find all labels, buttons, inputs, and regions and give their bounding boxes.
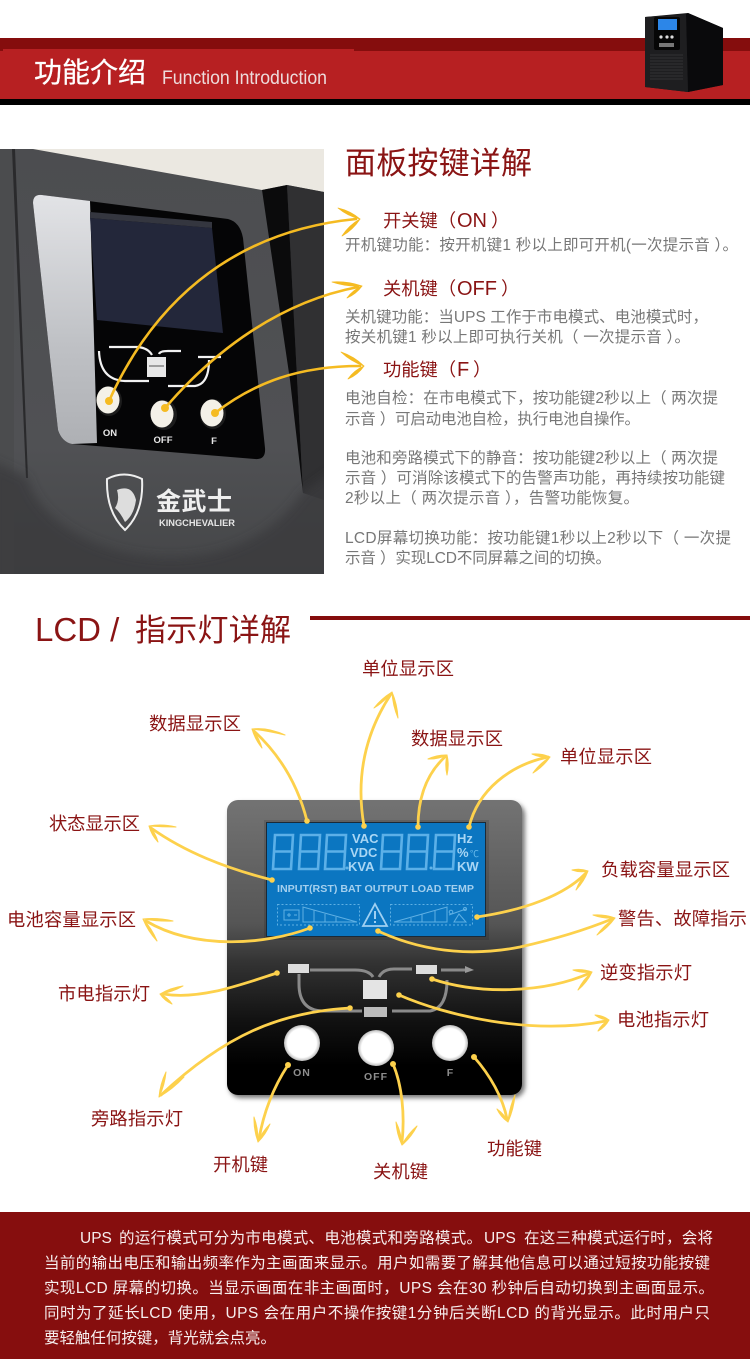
- text block: F key: [345, 359, 731, 567]
- footer note: 在这三种模式运行时，会将: [524, 1229, 713, 1247]
- unit labels: %: [457, 845, 469, 860]
- text block: F key: 电池自检：在市电模式下，按功能键2秒以上（ 两次提: [345, 389, 718, 407]
- callout: load capacity: [474, 859, 730, 920]
- panel buttons: [284, 1025, 468, 1083]
- brand logo: 金武士: [156, 488, 232, 516]
- callout: data area left: 数据显示区: [149, 713, 241, 734]
- callout: unit area top: 单位显示区: [362, 658, 454, 679]
- footer note: 实现LCD 屏幕的切换。当显示画面在非主画面时，UPS 会在30 秒钟后自动切换到主画面显示。: [44, 1279, 714, 1297]
- panel buttons: OFF: [364, 1071, 388, 1083]
- text block: F key: F: [457, 359, 469, 381]
- callout: battery capacity: 电池容量显示区: [7, 909, 136, 930]
- unit labels: ℃: [470, 849, 479, 859]
- seven-segment digits: [273, 835, 455, 869]
- callout: unit area right: [466, 746, 652, 830]
- footer note: 的运行模式可分为市电模式、电池模式和旁路模式。: [119, 1229, 482, 1247]
- callout: power-on key: [213, 1062, 291, 1175]
- callout: power-off key: 关机键: [373, 1161, 428, 1182]
- footer note: [0, 1212, 750, 1359]
- callout: battery capacity: [7, 909, 313, 942]
- LCD screen: [266, 822, 486, 936]
- footer note: 当前的输出电压和输出频率作为主画面来显示。用户如需要了解其他信息可以通过短按功能按键: [44, 1254, 710, 1272]
- icon: UPS tower: [645, 13, 723, 92]
- header title: 功能介绍: [34, 57, 146, 88]
- text block: OFF key: ）: [501, 278, 519, 299]
- unit labels: VDC: [350, 845, 378, 860]
- text block: OFF key: OFF: [457, 278, 497, 300]
- text block: ON key: 开关键（: [383, 210, 456, 231]
- text block: ON key: [345, 210, 738, 254]
- callout: battery lamp: 电池指示灯: [617, 1009, 709, 1030]
- indicator lamps: [288, 964, 474, 1017]
- text block: ON key: ON: [457, 210, 487, 232]
- footer note: UPS: [80, 1230, 112, 1247]
- header banner: [0, 38, 750, 105]
- unit labels: Hz: [457, 831, 473, 846]
- section heading: LCD: [35, 611, 291, 648]
- callout: mains lamp: 市电指示灯: [58, 983, 150, 1004]
- text block: F key: LCD屏幕切换功能：按功能键1秒以上2秒以下（ 一次提: [345, 529, 731, 547]
- callout: inverter lamp: [429, 962, 692, 990]
- unit labels: VAC: [352, 831, 379, 846]
- header subtitle: Function Introduction: [162, 68, 327, 89]
- arrow: F key: [211, 352, 364, 417]
- callout: power-off key: [373, 1061, 428, 1182]
- callout: inverter lamp: 逆变指示灯: [600, 962, 692, 983]
- text block: F key: 示音 ）可启动电池自检，执行电池自操作。: [345, 410, 640, 428]
- unit labels: KW: [457, 859, 479, 874]
- callout: warning and fault: [375, 908, 747, 952]
- arrow: OFF key: [161, 282, 362, 412]
- text block: F key: 2秒以上（ 两次提示音 ），告警功能恢复。: [345, 489, 639, 507]
- panel: product photo: [0, 149, 334, 590]
- callout: mains lamp: [58, 970, 280, 1004]
- section heading: LCD: LCD /: [35, 611, 120, 648]
- callout: unit area top: [361, 658, 454, 829]
- section heading: panel keys: 面板按键详解: [345, 146, 532, 181]
- brand logo: KINGCHEVALIER: [159, 518, 235, 529]
- callout: warning and fault: 警告、故障指示: [618, 908, 747, 929]
- unit labels: [348, 831, 479, 874]
- callout: battery lamp: [396, 992, 709, 1031]
- text block: F key: 示音 ）实现LCD不同屏幕之间的切换。: [345, 549, 611, 567]
- load gauge: [390, 904, 472, 925]
- callout: status area: 状态显示区: [49, 813, 140, 834]
- text block: OFF key: [345, 278, 708, 346]
- callout: data area right: 数据显示区: [411, 728, 503, 749]
- footer note: 同时为了延长LCD 使用，UPS 会在用户不操作按键1分钟后关断LCD 的背光显示。此时用户只: [44, 1304, 710, 1322]
- callout: bypass lamp: [91, 1005, 353, 1129]
- text block: OFF key: 关机键（: [383, 278, 456, 299]
- buttons: [96, 386, 226, 447]
- callout: function key: 功能键: [487, 1138, 542, 1159]
- buttons: ON: [103, 428, 117, 439]
- callout: status area: [49, 813, 275, 883]
- battery gauge: [278, 904, 360, 925]
- status labels: INPUT(RST) BAT OUTPUT LOAD TEMP: [277, 883, 474, 895]
- text block: OFF key: 按关机键1 秒以上即可执行关机（ 一次提示音 ）。: [345, 328, 690, 346]
- text block: F key: ）: [473, 359, 491, 380]
- callout: bypass lamp: 旁路指示灯: [91, 1108, 183, 1129]
- text block: F key: 电池和旁路模式下的静音：按功能键2秒以上（ 两次提: [345, 449, 718, 467]
- screen bezel: [33, 195, 265, 459]
- text block: F key: 功能键（: [383, 359, 456, 380]
- footer note: UPS: [484, 1230, 516, 1247]
- text block: F key: 示音 ）可消除该模式下的告警声功能，再持续按功能键: [345, 469, 725, 487]
- panel buttons: ON: [293, 1067, 311, 1079]
- footer note: 要轻触任何按键，背光就会点亮。: [44, 1329, 276, 1347]
- callout: data area left: [149, 713, 310, 824]
- unit labels: KVA: [348, 859, 375, 874]
- callout: power-on key: 开机键: [213, 1154, 268, 1175]
- text block: ON key: 开机键功能：按开机键1 秒以上即可开机(一次提示音 ）。: [345, 236, 738, 254]
- warning triangle: [363, 904, 387, 926]
- panel buttons: F: [447, 1067, 454, 1079]
- callout: function key: [471, 1054, 542, 1159]
- arrow: ON key: [105, 208, 360, 405]
- buttons: OFF: [154, 435, 173, 446]
- text block: OFF key: 关机键功能：当UPS 工作于市电模式、电池模式时，: [345, 308, 708, 326]
- buttons: F: [211, 436, 217, 447]
- section heading: LCD: 指示灯详解: [135, 613, 291, 648]
- text block: ON key: ）: [491, 210, 509, 231]
- callout: unit area right: 单位显示区: [560, 746, 652, 767]
- callout: load capacity: 负载容量显示区: [601, 859, 730, 880]
- panel: LCD front panel: [227, 800, 525, 1098]
- indicator symbols: [99, 347, 221, 386]
- brand logo: [107, 474, 235, 530]
- callout: data area right: [411, 728, 503, 830]
